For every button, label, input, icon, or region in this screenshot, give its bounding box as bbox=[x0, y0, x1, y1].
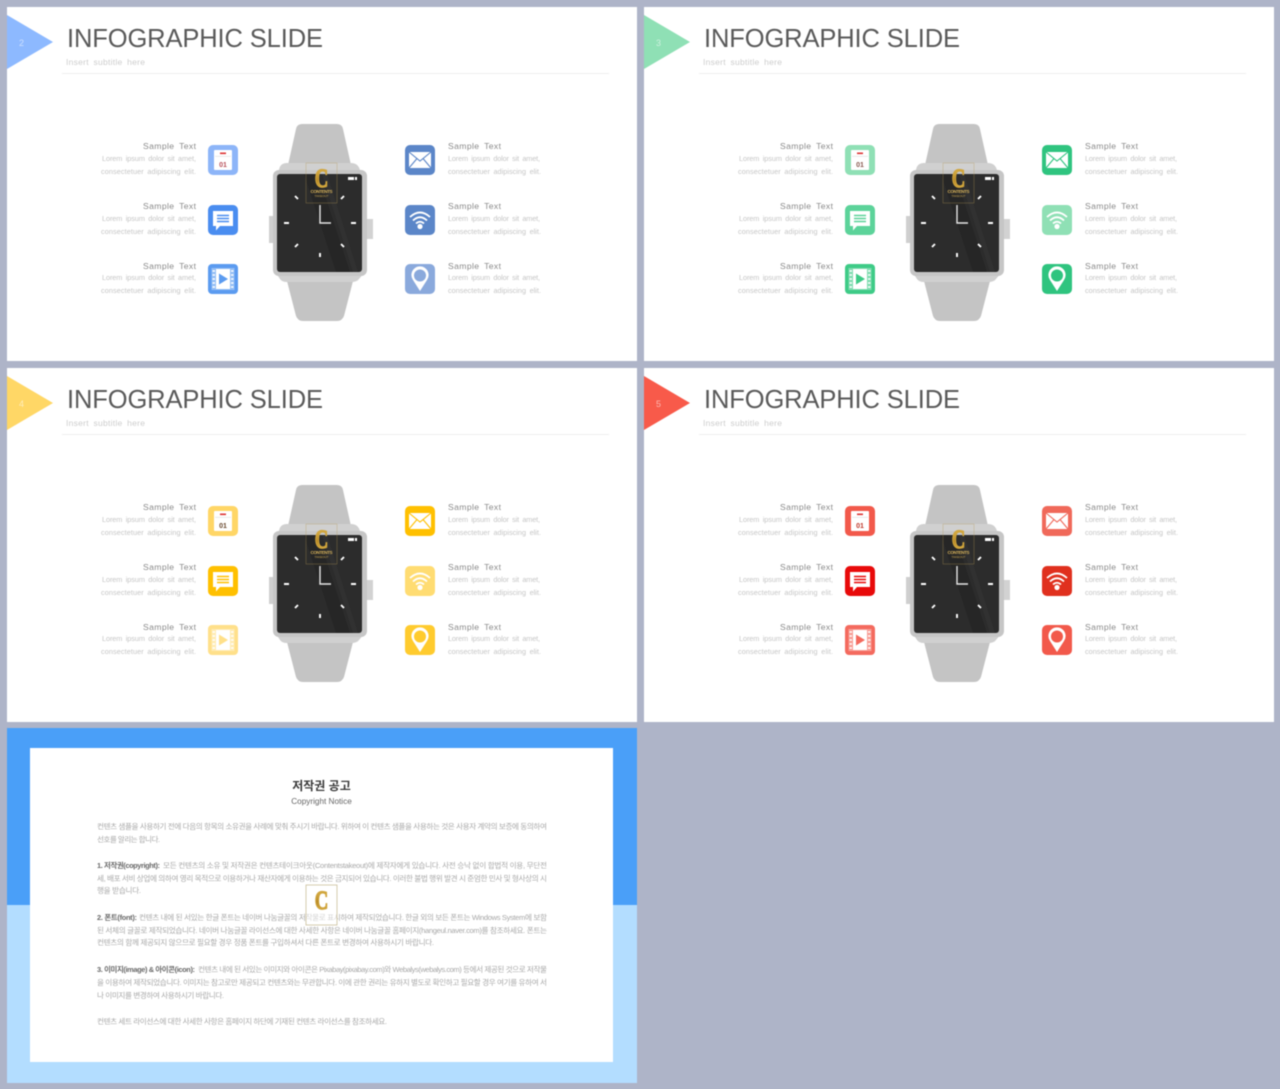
text block: left 3 bbox=[101, 261, 197, 295]
text block: right 3: consectetuer adipiscing elit. bbox=[448, 286, 541, 295]
text block: right 1: Sample Text bbox=[448, 502, 502, 512]
text block: section 2: 된 서체의 글꼴로 제작되었습니다. 네이버 나눔글꼴 라이선스에 대한 사세한 사항은 네이버 나눔글꼴 홈페이지(hangeul.naver.com)를 참조하세요. 폰트는 bbox=[97, 925, 547, 935]
logo bbox=[943, 524, 974, 564]
text block: intro: 컨텐츠 샘플을 사용하기 전에 다음의 항목의 소유권을 사례에 맞춰 주시기 바랍니다. 위하여 이 컨텐츠 샘플을 사용하는 것은 사용자 계약의 보증에 동의하여 bbox=[97, 821, 547, 831]
text block: left 2: Sample Text bbox=[780, 562, 834, 572]
icon: header triangle bbox=[7, 15, 53, 69]
text block: right 2 bbox=[1085, 562, 1178, 597]
icon: wifi bbox=[405, 566, 435, 596]
text block: intro: 선호를 알리는 합니다. bbox=[97, 834, 160, 844]
text block: left 2: Lorem ipsum dolor sit amet, bbox=[102, 214, 196, 223]
logo: C bbox=[315, 886, 328, 915]
text block: section 2: 컨텐츠의 함께 제공되지 않으므로 필요할 경우 정품 폰트를 구입하셔서 다른 폰트로 변경하여 사용하시기 바랍니다. bbox=[97, 937, 434, 947]
icon: calendar: 01 bbox=[856, 162, 864, 169]
logo: TAKEOUT bbox=[314, 555, 329, 559]
icon: header triangle bbox=[644, 15, 690, 69]
text block: right 2: consectetuer adipiscing elit. bbox=[1085, 588, 1178, 597]
text block: left 3: Sample Text bbox=[143, 622, 197, 632]
text block: right 3: consectetuer adipiscing elit. bbox=[448, 647, 541, 656]
text block: section 3: 컨텐츠 내에 된 서있는 이미지와 아이콘은 Pixabay(pixabay.com)와 Webalys(webalys.com) 등에서 제공된 것으로 저작물 bbox=[198, 964, 547, 974]
logo: C bbox=[952, 525, 965, 554]
text block: right 2: Sample Text bbox=[1085, 562, 1139, 572]
heading: copyright: Copyright Notice bbox=[291, 797, 352, 806]
text block: left 2 bbox=[101, 201, 197, 236]
icon: wifi bbox=[1042, 566, 1072, 596]
text block: right 2: consectetuer adipiscing elit. bbox=[448, 227, 541, 236]
text block: right 2 bbox=[448, 201, 541, 236]
smartwatch bbox=[269, 485, 373, 682]
icon: header triangle: 5 bbox=[656, 399, 661, 409]
panel: yellow slide bbox=[7, 368, 637, 722]
icon: calendar: 01 bbox=[219, 162, 227, 169]
text block: right 1: Lorem ipsum dolor sit amet, bbox=[448, 154, 540, 163]
heading: copyright: 저작권 공고 bbox=[292, 778, 351, 793]
icon: video bbox=[845, 264, 875, 294]
icon: wifi bbox=[405, 205, 435, 235]
text block: left 1: Lorem ipsum dolor sit amet, bbox=[102, 154, 196, 163]
icon: video bbox=[208, 264, 238, 294]
text block: section 1: 모든 컨텐츠의 소유 및 저작권은 컨텐츠테이크아웃(Contentstakeout)에 제작자에게 있습니다. 사전 승낙 없이 합법적 이용, 무단전 bbox=[163, 860, 547, 870]
text block: left 3 bbox=[101, 622, 197, 656]
text block: right 3: consectetuer adipiscing elit. bbox=[1085, 286, 1178, 295]
text block: left 2: consectetuer adipiscing elit. bbox=[738, 227, 833, 236]
logo: CONTENTS bbox=[310, 189, 332, 194]
text block: section 3: 나 이미지를 변경하여 사용하시기 바랍니다. bbox=[97, 990, 224, 1000]
text block: left 3: Sample Text bbox=[780, 622, 834, 632]
text block: right 1: consectetuer adipiscing elit. bbox=[448, 167, 541, 176]
icon: header triangle: 2 bbox=[19, 38, 24, 48]
text block: left 2 bbox=[101, 562, 197, 597]
text block: right 1 bbox=[448, 502, 541, 537]
text block: right 1: consectetuer adipiscing elit. bbox=[448, 528, 541, 537]
icon: mail bbox=[405, 145, 435, 175]
icon: calendar: 01 bbox=[219, 523, 227, 530]
logo: C bbox=[315, 164, 328, 193]
text block: section 2: 2. 폰트(font): bbox=[97, 913, 137, 922]
text block: left 3 bbox=[738, 261, 834, 295]
text block: right 2: Sample Text bbox=[1085, 201, 1139, 211]
text block: left 2: Sample Text bbox=[780, 201, 834, 211]
text block: right 3 bbox=[448, 261, 541, 295]
icon: chat bbox=[208, 205, 238, 235]
text block: right 2: Lorem ipsum dolor sit amet, bbox=[448, 575, 540, 584]
icon: mail bbox=[405, 506, 435, 536]
text block: right 2: Sample Text bbox=[448, 201, 502, 211]
text block: section 3: 을 이용하여 제작되었습니다. 이미지는 참고로만 제공되고 컨텐츠와는 무관합니다. 이에 관한 권리는 유하지 별도로 확인하고 필요할 경우 여기를 유하여 서 bbox=[97, 977, 547, 987]
text block: right 1: consectetuer adipiscing elit. bbox=[1085, 167, 1178, 176]
logo: C bbox=[952, 164, 965, 193]
text block: left 3: consectetuer adipiscing elit. bbox=[101, 286, 196, 295]
icon: calendar bbox=[845, 145, 875, 175]
text block: left 2: Lorem ipsum dolor sit amet, bbox=[102, 575, 196, 584]
text block: right 3 bbox=[1085, 622, 1178, 656]
panel: blue slide bbox=[7, 7, 637, 361]
text block: left 3: Lorem ipsum dolor sit amet, bbox=[102, 634, 196, 643]
text block: left 1: consectetuer adipiscing elit. bbox=[738, 528, 833, 537]
icon: calendar bbox=[208, 145, 238, 175]
text block: right 2: Lorem ipsum dolor sit amet, bbox=[448, 214, 540, 223]
text block: left 3: consectetuer adipiscing elit. bbox=[101, 647, 196, 656]
smartwatch bbox=[906, 485, 1010, 682]
text block: left 1: Sample Text bbox=[143, 502, 197, 512]
text block: left 1: Lorem ipsum dolor sit amet, bbox=[739, 154, 833, 163]
text block: left 1 bbox=[101, 141, 197, 176]
logo bbox=[306, 885, 337, 925]
icon: location pin bbox=[405, 264, 435, 294]
subtitle: Insert subtitle here bbox=[66, 57, 145, 67]
text block: right 1 bbox=[1085, 502, 1178, 537]
logo: TAKEOUT bbox=[314, 194, 329, 198]
text block: left 1: Sample Text bbox=[780, 141, 834, 151]
panel: green slide bbox=[644, 7, 1274, 361]
text block: right 2: Lorem ipsum dolor sit amet, bbox=[1085, 575, 1177, 584]
text block: left 3: Lorem ipsum dolor sit amet, bbox=[739, 273, 833, 282]
text block: right 1: Sample Text bbox=[1085, 141, 1139, 151]
text block: left 3: consectetuer adipiscing elit. bbox=[738, 286, 833, 295]
text block: left 3: Lorem ipsum dolor sit amet, bbox=[102, 273, 196, 282]
heading: copyright bbox=[291, 778, 352, 806]
icon: location pin bbox=[405, 625, 435, 655]
text block: section 3: 3. 이미지(image) & 아이콘(icon): bbox=[97, 965, 195, 974]
icon: header triangle bbox=[644, 376, 690, 430]
icon: chat bbox=[845, 205, 875, 235]
smartwatch bbox=[269, 124, 373, 321]
text block: right 3: Sample Text bbox=[448, 622, 502, 632]
text block: right 3: Lorem ipsum dolor sit amet, bbox=[1085, 273, 1177, 282]
text block: left 1 bbox=[738, 502, 834, 537]
text block: left 1 bbox=[738, 141, 834, 176]
text block: left 3: consectetuer adipiscing elit. bbox=[738, 647, 833, 656]
icon: video bbox=[845, 625, 875, 655]
text block: left 1: Lorem ipsum dolor sit amet, bbox=[739, 515, 833, 524]
text block: left 1: consectetuer adipiscing elit. bbox=[738, 167, 833, 176]
subtitle: Insert subtitle here bbox=[703, 57, 782, 67]
text block: left 2 bbox=[738, 562, 834, 597]
text block: right 3: Sample Text bbox=[1085, 261, 1139, 271]
text block: right 2: Lorem ipsum dolor sit amet, bbox=[1085, 214, 1177, 223]
text block: section 1: 세, 배포 서비 상업에 의하여 영리 목적으로 이용하거나 재산자에게 이용하는 것은 금지되어 있습니다. 이러한 불법 행위 발견 시 준엄한 민사 및 형사상의 시 bbox=[97, 873, 547, 883]
text block: right 3: Lorem ipsum dolor sit amet, bbox=[1085, 634, 1177, 643]
icon: chat bbox=[845, 566, 875, 596]
logo bbox=[943, 163, 974, 203]
text block: left 3 bbox=[738, 622, 834, 656]
logo: C bbox=[315, 525, 328, 554]
text block: left 1: consectetuer adipiscing elit. bbox=[101, 167, 196, 176]
text block: right 1: Lorem ipsum dolor sit amet, bbox=[1085, 515, 1177, 524]
logo: CONTENTS bbox=[948, 550, 970, 555]
text block: right 3: consectetuer adipiscing elit. bbox=[1085, 647, 1178, 656]
logo: TAKEOUT bbox=[952, 555, 966, 559]
text block: left 1: consectetuer adipiscing elit. bbox=[101, 528, 196, 537]
title: INFOGRAPHIC SLIDE bbox=[704, 386, 960, 414]
text block: left 2: consectetuer adipiscing elit. bbox=[101, 227, 196, 236]
text block: right 2: Sample Text bbox=[448, 562, 502, 572]
text block: left 3: Lorem ipsum dolor sit amet, bbox=[739, 634, 833, 643]
text block: right 3: Sample Text bbox=[448, 261, 502, 271]
text block: right 3 bbox=[448, 622, 541, 656]
text block: left 1: Lorem ipsum dolor sit amet, bbox=[102, 515, 196, 524]
text block: left 1 bbox=[101, 502, 197, 537]
icon: mail bbox=[1042, 506, 1072, 536]
icon: header triangle: 4 bbox=[19, 399, 24, 409]
title: INFOGRAPHIC SLIDE bbox=[67, 386, 323, 414]
icon: location pin bbox=[1042, 625, 1072, 655]
icon: calendar bbox=[208, 506, 238, 536]
text block: right 1: Sample Text bbox=[448, 141, 502, 151]
text block: right 2: consectetuer adipiscing elit. bbox=[448, 588, 541, 597]
text block: left 2: Sample Text bbox=[143, 562, 197, 572]
icon: location pin bbox=[1042, 264, 1072, 294]
text block: section 1 bbox=[97, 860, 547, 895]
title: INFOGRAPHIC SLIDE bbox=[67, 25, 323, 53]
logo: TAKEOUT bbox=[952, 194, 966, 198]
icon: calendar: 01 bbox=[856, 523, 864, 530]
icon: video bbox=[208, 625, 238, 655]
text block: right 3: Lorem ipsum dolor sit amet, bbox=[448, 634, 540, 643]
text block: right 3 bbox=[1085, 261, 1178, 295]
text block: right 3: Sample Text bbox=[1085, 622, 1139, 632]
subtitle: Insert subtitle here bbox=[703, 418, 782, 428]
text block: left 1: Sample Text bbox=[780, 502, 834, 512]
text block: left 2 bbox=[738, 201, 834, 236]
text block: right 3: Lorem ipsum dolor sit amet, bbox=[448, 273, 540, 282]
logo: CONTENTS bbox=[310, 550, 332, 555]
panel: red slide bbox=[644, 368, 1274, 722]
text block: left 2: Lorem ipsum dolor sit amet, bbox=[739, 575, 833, 584]
panel: copyright notice bbox=[7, 728, 637, 1083]
text block: left 2: Lorem ipsum dolor sit amet, bbox=[739, 214, 833, 223]
text block: left 3: Sample Text bbox=[780, 261, 834, 271]
icon: wifi bbox=[1042, 205, 1072, 235]
text block: right 1: Sample Text bbox=[1085, 502, 1139, 512]
smartwatch bbox=[906, 124, 1010, 321]
text block: right 2: consectetuer adipiscing elit. bbox=[1085, 227, 1178, 236]
icon: header triangle bbox=[7, 376, 53, 430]
logo bbox=[306, 524, 337, 564]
text block: section 2: 컨텐츠 내에 된 서있는 한글 폰트는 네이버 나눔글꼴의 저작물로 표시하여 제작되었습니다. 한글 외의 보든 폰트는 Windows System에 보함 bbox=[139, 912, 547, 922]
text block: section 3 bbox=[97, 964, 547, 1000]
text block: right 1 bbox=[1085, 141, 1178, 176]
text block: left 2: consectetuer adipiscing elit. bbox=[101, 588, 196, 597]
text block: right 1 bbox=[448, 141, 541, 176]
text block: section 1: 행을 받습니다. bbox=[97, 885, 141, 895]
text block: left 1: Sample Text bbox=[143, 141, 197, 151]
text block: left 3: Sample Text bbox=[143, 261, 197, 271]
text block: right 2 bbox=[1085, 201, 1178, 236]
icon: header triangle: 3 bbox=[656, 38, 661, 48]
title: INFOGRAPHIC SLIDE bbox=[704, 25, 960, 53]
text block: section 1: 1. 저작권(copyright): bbox=[97, 861, 160, 870]
icon: chat bbox=[208, 566, 238, 596]
subtitle: Insert subtitle here bbox=[66, 418, 145, 428]
text block: license note: 컨텐츠 세트 라이선스에 대한 사세한 사항은 홈페이지 하단에 기재된 컨텐츠 라이선스를 참조하세요. bbox=[97, 1016, 387, 1026]
icon: calendar bbox=[845, 506, 875, 536]
text block: left 2: Sample Text bbox=[143, 201, 197, 211]
text block: intro bbox=[97, 821, 547, 844]
text block: right 1: Lorem ipsum dolor sit amet, bbox=[1085, 154, 1177, 163]
logo: CONTENTS bbox=[948, 189, 970, 194]
text block: right 1: Lorem ipsum dolor sit amet, bbox=[448, 515, 540, 524]
text block: left 2: consectetuer adipiscing elit. bbox=[738, 588, 833, 597]
text block: section 2 bbox=[97, 912, 547, 947]
logo bbox=[306, 163, 337, 203]
icon: mail bbox=[1042, 145, 1072, 175]
text block: right 2 bbox=[448, 562, 541, 597]
text block: right 1: consectetuer adipiscing elit. bbox=[1085, 528, 1178, 537]
